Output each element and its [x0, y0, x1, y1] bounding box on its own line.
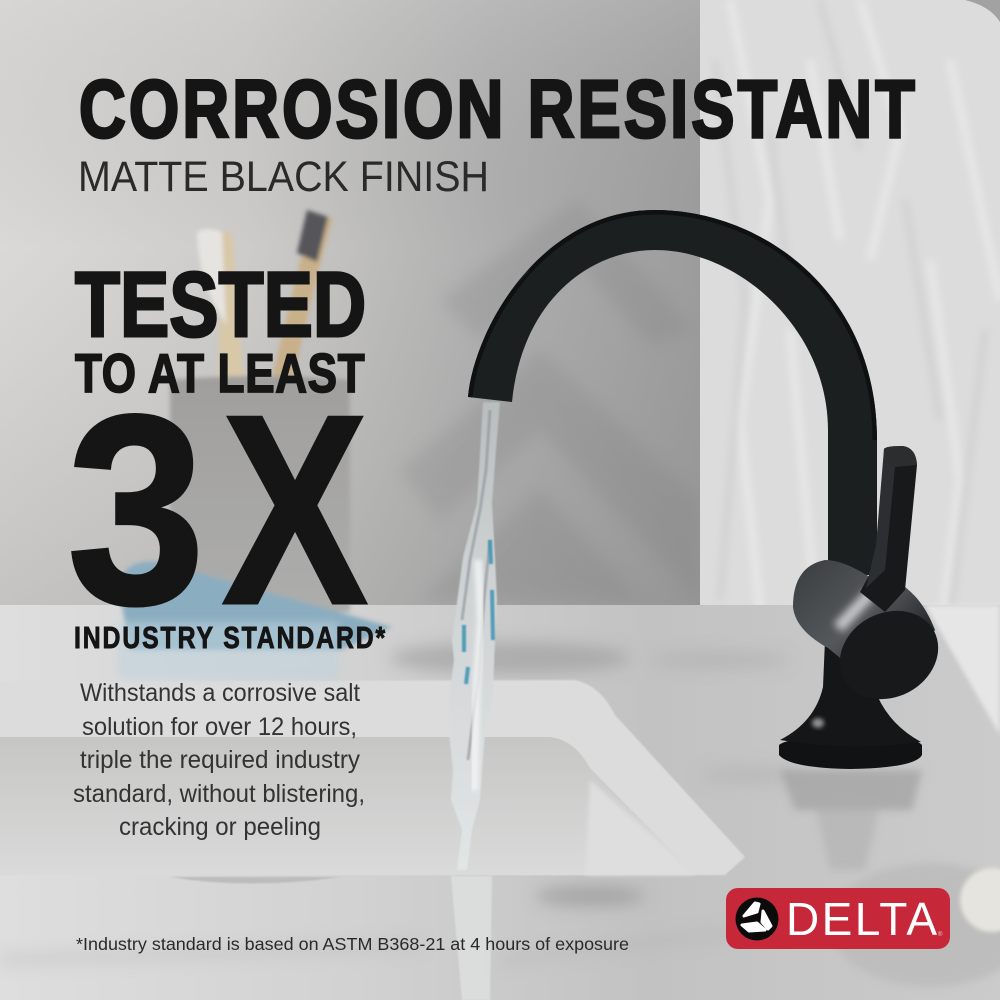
- registered mark: ®: [938, 931, 943, 938]
- basin interior: [0, 737, 696, 875]
- faucet: stem: [780, 640, 921, 747]
- water: highlight: [474, 560, 481, 790]
- faucet: spout: [468, 210, 877, 575]
- water: blue streaks: [464, 540, 493, 684]
- heading: industry standard: INDUSTRY STANDARD*: [74, 620, 385, 655]
- toothbrush: white: [197, 229, 244, 382]
- faucet: handle body: [793, 560, 935, 695]
- cup: [170, 376, 350, 612]
- marble counter: [0, 605, 1000, 1000]
- body text: Withstands a corrosive salt: [80, 679, 360, 707]
- title: CORROSION RESISTANT: [79, 63, 915, 155]
- heading: to at least: TO AT LEAST: [75, 342, 365, 404]
- wordmark: DELTA: [786, 893, 937, 945]
- footnote: *Industry standard is based on ASTM B368-21 at 4 hours of exposure: [76, 934, 629, 954]
- sink front shadow: [170, 877, 340, 884]
- plate and ball bottom right: [830, 863, 1000, 987]
- big number 3X: [67, 358, 368, 661]
- big number 3X: X: [222, 360, 368, 661]
- water: reflection: [451, 876, 492, 1000]
- body text: cracking or peeling: [119, 813, 321, 841]
- water: upper stream: [449, 402, 500, 870]
- body text: [73, 679, 365, 841]
- faucet: lever: [860, 446, 917, 612]
- body text: solution for over 12 hours,: [82, 713, 357, 741]
- body text: triple the required industry: [80, 746, 360, 774]
- blurred toothbrushes and cup: [118, 210, 392, 650]
- left wall background: [0, 0, 702, 620]
- toothpaste reflection: [118, 622, 338, 678]
- basin light wall: [585, 780, 696, 875]
- faucet: handle highlight: [838, 592, 872, 628]
- toothpaste tube: [118, 561, 392, 650]
- Delta logo: [726, 888, 950, 949]
- faucet: base: [779, 736, 922, 769]
- heading: tested: TESTED: [75, 253, 366, 356]
- icon: delta triangle mark: [736, 898, 778, 940]
- water stream: [449, 402, 500, 1000]
- faucet: spout highlights: [468, 210, 877, 440]
- faucet: stem highlight: [812, 718, 824, 728]
- faucet: handle disc: [824, 594, 954, 716]
- sink basin: [0, 680, 745, 884]
- faucet: [468, 210, 954, 769]
- toothbrush: dark bristles: [272, 210, 333, 378]
- faucet reflection: [780, 770, 922, 870]
- right wall marble: [700, 0, 1000, 640]
- body text: standard, without blistering,: [73, 780, 365, 808]
- mirror edge top right: [965, 0, 1000, 22]
- big number 3X: 3: [67, 358, 205, 660]
- subtitle: MATTE BLACK FINISH: [78, 154, 489, 201]
- sink rim: [0, 680, 745, 875]
- water: grey streaks: [462, 410, 490, 760]
